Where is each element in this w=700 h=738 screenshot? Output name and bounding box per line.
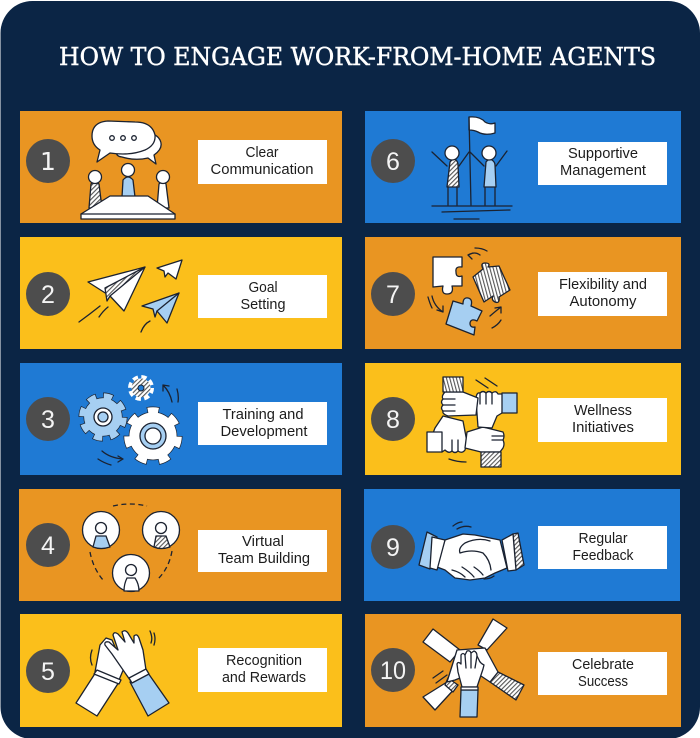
number badge 9	[371, 525, 415, 569]
panel 1: clear communication	[20, 111, 342, 223]
label: goal setting: Setting	[240, 296, 286, 313]
panel 2: goal setting	[20, 237, 342, 349]
label: regular feedback: Feedback	[572, 547, 634, 564]
number badge 3	[26, 397, 70, 441]
icon: paper planes	[79, 260, 182, 332]
label: clear communication: Clear	[246, 144, 278, 161]
label: virtual team building: Team Building	[218, 550, 310, 567]
panel 7: flexibility and autonomy	[365, 237, 681, 349]
label: celebrate success: Celebrate	[572, 656, 634, 673]
number badge 8: 8	[386, 406, 400, 434]
label: celebrate success: Success	[578, 673, 628, 690]
icon: meeting with speech bubbles	[81, 121, 175, 219]
icon: stacked hands	[423, 619, 524, 717]
label: training and development: Training and	[222, 406, 304, 423]
label: goal setting: Goal	[248, 279, 278, 296]
number badge 10: 10	[380, 657, 406, 685]
icon: two people with flag	[432, 117, 512, 219]
label: recognition and rewards: and Rewards	[222, 669, 306, 686]
number badge 7: 7	[386, 281, 400, 309]
number badge 2	[26, 272, 70, 316]
number badge 5: 5	[41, 658, 55, 686]
title: HOW TO ENGAGE WORK-FROM-HOME AGENTS	[59, 43, 656, 71]
number badge 5	[26, 649, 70, 693]
icon: handshake	[419, 522, 524, 580]
label: training and development: Development	[220, 423, 308, 440]
panel 6: supportive management	[365, 111, 681, 223]
icon: interlocked hands	[427, 377, 517, 467]
icon: gears	[82, 378, 178, 465]
label: virtual team building	[198, 530, 327, 572]
label: supportive management: Management	[560, 162, 647, 179]
label: wellness initiatives: Wellness	[574, 402, 632, 419]
label: recognition and rewards	[198, 648, 327, 692]
icon: video call circles	[82, 504, 180, 592]
panel 8: wellness initiatives	[365, 363, 681, 475]
number badge 4: 4	[41, 532, 55, 560]
number badge 4	[26, 523, 70, 567]
panel 3: training and development	[20, 363, 342, 475]
label: flexibility and autonomy: Flexibility and	[559, 276, 647, 293]
number badge 6: 6	[386, 148, 400, 176]
label: clear communication	[198, 140, 327, 184]
label: training and development	[198, 402, 327, 445]
label: flexibility and autonomy: Autonomy	[570, 293, 637, 310]
number badge 8	[371, 397, 415, 441]
number badge 1	[26, 139, 70, 183]
label: recognition and rewards: Recognition	[226, 652, 302, 669]
label: supportive management: Supportive	[568, 145, 638, 162]
number badge 10	[371, 648, 415, 692]
number badge 7	[371, 272, 415, 316]
icon: high five	[76, 631, 169, 716]
label: regular feedback	[538, 526, 667, 569]
number badge 3: 3	[41, 406, 55, 434]
number badge 6	[371, 139, 415, 183]
label: goal setting	[198, 275, 327, 318]
number badge 2: 2	[41, 281, 55, 309]
label: flexibility and autonomy	[538, 272, 667, 316]
label: regular feedback: Regular	[578, 530, 628, 547]
label: celebrate success	[538, 652, 667, 695]
panel 4: virtual team building	[19, 489, 341, 601]
label: wellness initiatives: Initiatives	[572, 419, 634, 436]
icon: puzzle pieces	[428, 248, 510, 335]
label: virtual team building: Virtual	[242, 533, 284, 550]
panel 10: celebrate success	[365, 614, 681, 727]
label: clear communication: Communication	[210, 161, 314, 178]
number badge 1: 1	[40, 147, 56, 176]
number badge 9: 9	[386, 534, 400, 562]
label: wellness initiatives	[538, 398, 667, 442]
label: supportive management	[538, 142, 667, 185]
panel 9: regular feedback	[364, 489, 680, 601]
panel 5: recognition and rewards	[20, 614, 342, 727]
